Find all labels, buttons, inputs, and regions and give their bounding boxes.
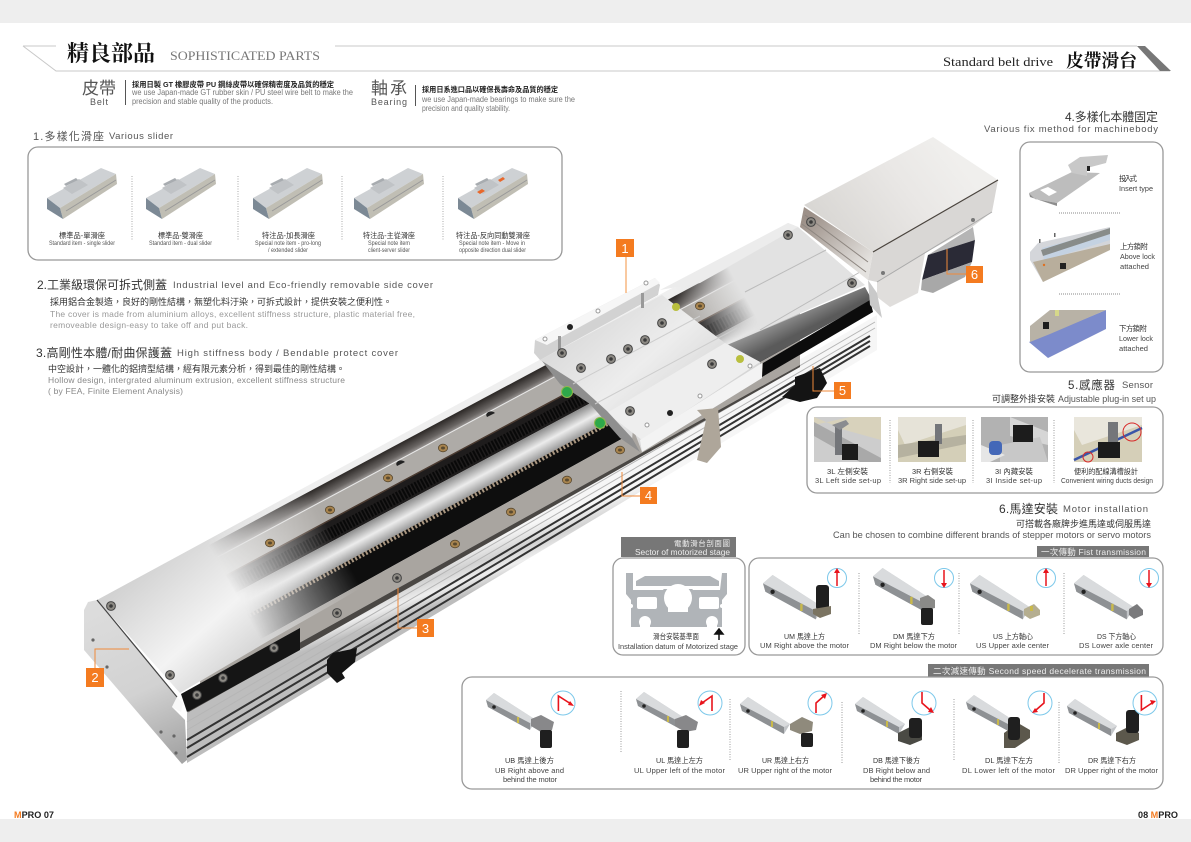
sensor 3R: 3R Right side set-up [898, 476, 966, 485]
title: standard belt drive [943, 46, 1171, 71]
heading 6: motor installation [833, 501, 1151, 541]
US [970, 568, 1056, 650]
sensor wiring: Convenient wiring ducts design [1061, 476, 1153, 485]
belt note [82, 79, 354, 107]
heading 1: various slider [33, 129, 173, 143]
UM: UM 馬達上方 [784, 631, 825, 641]
top band [0, 0, 1191, 23]
callout 3: 3 [422, 621, 429, 636]
lower lock: attached [1119, 344, 1148, 353]
DL: DL Lower left of the motor [962, 766, 1056, 775]
datum label: 滑台安裝基準面 [653, 631, 699, 641]
section 3: high stiffness body [36, 345, 398, 396]
sensor 3I: 3I Inside set-up [986, 476, 1042, 485]
UL [634, 691, 726, 775]
section 2: removable side cover: 2.工業級環保可拆式側蓋 [37, 277, 167, 292]
slider: standard dual: 標準品-雙滑座 [158, 230, 203, 240]
slider: client-server: 特注品-主從滑座 [363, 230, 415, 240]
panel: fix method [1020, 142, 1163, 372]
belt note: 採用日製 GT 橡膠皮帶 PU 鋼絲皮帶以確保精密度及品質的穩定 [132, 79, 334, 89]
lower lock [1029, 310, 1153, 358]
belt note: precision and stable quality of the products. [132, 97, 273, 106]
slider: prolong: / extended slider [268, 247, 309, 254]
sensor 3R: 3R 右側安裝 [912, 466, 953, 476]
title: standard belt drive: 皮帶滑台 [1066, 51, 1138, 71]
sensor 3L: 3L Left side set-up [815, 476, 881, 485]
bearing note: precision and quality stability. [422, 104, 510, 113]
slider: standard single: 標準品-單滑座 [59, 230, 105, 240]
slider: client-server [354, 168, 424, 254]
bottom band [0, 819, 1191, 842]
callout 1 [616, 239, 634, 293]
slider: opposite direction: opposite direction dual slider [459, 247, 527, 254]
DM: DM Right below the motor [870, 641, 958, 650]
panel: second transmission [462, 677, 1163, 789]
sensor wiring [1061, 417, 1153, 485]
tag: sector of motorized stage: Sector of motorized stage [635, 548, 731, 557]
DR: DR Upper right of the motor [1065, 766, 1158, 775]
heading 5: sensor: Adjustable plug-in set up [1058, 394, 1156, 405]
section 3: high stiffness body: Hollow design, intergrated aluminum extrusion, excellent stiffness structure [48, 375, 345, 385]
callout 4 [622, 472, 657, 504]
UB: UB 馬達上後方 [505, 755, 554, 765]
near dark end block [181, 628, 300, 712]
above lock: Above lock [1120, 252, 1155, 261]
section 2: removable side cover: The cover is made from aluminium alloys, excellent stiffness structure, plastic material free, [50, 309, 415, 319]
callout 6: 6 [971, 267, 978, 282]
side wall [187, 315, 877, 763]
belt note: Belt [90, 97, 108, 107]
datum arrow [715, 629, 723, 640]
slider: standard dual: Standard item - dual slider [149, 240, 213, 247]
footer right: page 08 and brand: 08 MPRO [1138, 810, 1178, 821]
UB [486, 691, 575, 784]
callout 3 [398, 588, 434, 637]
DS [1074, 568, 1158, 650]
slider: opposite direction: Special note item - Move in [459, 240, 525, 247]
panel: first transmission [749, 558, 1163, 655]
slider: standard single [47, 168, 117, 247]
DB [855, 691, 936, 784]
heading 4: fix method [984, 109, 1158, 135]
lower lock: 下方鎖附 [1119, 323, 1148, 333]
slider: client-server: client-server slider [368, 247, 411, 254]
sensor near [327, 648, 357, 683]
slider: prolong: 特注品-加長滑座 [262, 230, 315, 240]
UB: behind the motor [503, 775, 558, 784]
slider: prolong [253, 168, 323, 254]
above lock [1030, 227, 1155, 282]
above lock: attached [1120, 262, 1149, 271]
tag: sector of motorized stage: 電動滑台剖面圖 [674, 538, 730, 548]
title: sophisticated parts: 精良部品 [67, 41, 155, 66]
heading 5: sensor: 可調整外掛安裝 [992, 393, 1055, 404]
panel: sector [613, 558, 745, 655]
motor cover and motor [800, 137, 998, 318]
insert type: 投入式 [1119, 173, 1138, 183]
DR: DR 馬達下右方 [1088, 755, 1136, 765]
far cover [660, 223, 873, 377]
carriage [534, 278, 762, 463]
DL [962, 691, 1056, 775]
callout 2 [86, 649, 129, 687]
UR [738, 691, 832, 775]
section 3: high stiffness body: 中空設計，一體化的鋁擠型結構，經有限元素分析，得到最佳的剛性結構。 [48, 363, 345, 374]
panel: sensor [807, 407, 1163, 493]
belt note: we use Japan-made GT rubber skin / PU steel wire belt to make the [131, 88, 354, 97]
section 3: high stiffness body: ( by FEA, Finite Element Analysis) [48, 386, 183, 396]
UB: UB Right above and [495, 766, 564, 775]
US: US 上方軸心 [993, 631, 1033, 641]
near cover fade [98, 494, 356, 693]
tag: first transmission: 一次傳動 Fist transmission [1041, 547, 1146, 557]
heading 6: motor installation: Can be chosen to combine different brands of stepper motors or servo motors [833, 530, 1151, 541]
sensor far [782, 368, 827, 402]
callout 2: 2 [91, 670, 99, 685]
above lock: 上方鎖附 [1120, 241, 1148, 251]
UL: UL 馬達上左方 [656, 755, 703, 765]
callout 5 [813, 366, 851, 399]
heading 1: various slider: 1.多樣化滑座 [33, 129, 104, 143]
DB: behind the motor [870, 775, 922, 784]
insert type [1029, 155, 1153, 206]
heading 6: motor installation: Motor installation [1063, 504, 1148, 515]
sensor wiring: 便利的配線溝槽設計 [1074, 466, 1138, 476]
slider: opposite direction [456, 168, 530, 254]
DL: DL 馬達下左方 [985, 755, 1033, 765]
title: sophisticated parts [67, 41, 320, 66]
heading 5: sensor: 5.感應器 [1068, 378, 1116, 392]
callout 5: 5 [839, 383, 846, 398]
sensor 3I: 3I 內藏安裝 [995, 466, 1033, 476]
UR: UR Upper right of the motor [738, 766, 832, 775]
insert type: Insert type [1119, 184, 1153, 193]
UR: UR 馬達上右方 [762, 755, 809, 765]
DM [870, 568, 958, 650]
bearing note: 採用日系進口品以確保長壽命及品質的穩定 [422, 84, 558, 94]
bearing note: Bearing [371, 97, 407, 107]
sensor 3L: 3L 左側安裝 [827, 466, 869, 476]
lower lock: Lower lock [1119, 334, 1153, 343]
DS: DS Lower axle center [1079, 641, 1154, 650]
callout 4: 4 [645, 488, 652, 503]
slider: standard single: Standard item - single slider [49, 240, 116, 247]
US: US Upper axle center [976, 641, 1050, 650]
tag: second transmission: 二次減速傳動 Second speed decelerate transmission [933, 666, 1146, 676]
DB: DB Right below and [863, 766, 930, 775]
callout 1: 1 [621, 241, 629, 256]
extrusion cross-section [626, 573, 727, 628]
bearing note: 軸 承 [371, 79, 407, 98]
heading 5: sensor: Sensor [1122, 380, 1153, 391]
heading 4: fix method: 4.多樣化本體固定 [1065, 109, 1158, 124]
slider: opposite direction: 特注品-反向同動雙滑座 [456, 230, 530, 240]
slider: prolong: Special note item - pro-long [255, 240, 321, 247]
bearing note [371, 79, 576, 113]
footer left: brand and page 07: MPRO 07 [14, 810, 54, 821]
section 2: removable side cover: removeable design-easy to take off and put back. [50, 320, 248, 330]
title: standard belt drive: Standard belt drive [943, 54, 1053, 69]
top channel stripes [97, 224, 800, 713]
title: sophisticated parts: SOPHISTICATED PARTS [170, 48, 320, 63]
DM: DM 馬達下方 [893, 631, 935, 641]
section 3: high stiffness body: High stiffness body / Bendable protect cover [177, 348, 398, 359]
sensor 3R [898, 417, 966, 485]
bearing note: we use Japan-made bearings to make sure the [421, 95, 576, 104]
callout 6 [947, 249, 983, 283]
rail screws [107, 444, 625, 679]
heading 1: various slider: Various slider [109, 131, 173, 142]
UM: UM Right above the motor [760, 641, 850, 650]
section 2: removable side cover [37, 277, 433, 330]
UM [760, 568, 850, 650]
DB: DB 馬達下後方 [873, 755, 920, 765]
sensor 3I [981, 417, 1048, 485]
datum label: Installation datum of Motorized stage [618, 642, 738, 651]
slider: standard dual [146, 168, 216, 247]
heading 6: motor installation: 可搭載各廠牌步進馬達或伺服馬達 [1016, 518, 1151, 529]
heading 6: motor installation: 6.馬達安裝 [999, 501, 1058, 516]
header frame lines [23, 46, 1170, 71]
section 3: high stiffness body: 3.高剛性本體/耐曲保護蓋 [36, 345, 172, 360]
main product photo: belt drive stage [84, 137, 998, 764]
panel: various slider [28, 147, 562, 260]
DS: DS 下方軸心 [1097, 631, 1136, 641]
belt note: 皮 帶 [82, 79, 116, 98]
UL: UL Upper left of the motor [634, 766, 726, 775]
section 2: removable side cover: 採用鋁合金製造，良好的剛性結構，無塑化料汙染，可拆式設計，提供安裝之便利性。 [50, 296, 392, 307]
slider: client-server: Special note item [368, 240, 410, 247]
DR [1065, 691, 1158, 775]
end cap [84, 600, 187, 764]
datum label [618, 631, 738, 651]
sensor 3L [814, 417, 881, 485]
heading 4: fix method: Various fix method for machinebody [984, 124, 1158, 135]
tag: sector of motorized stage [621, 537, 736, 557]
section 2: removable side cover: Industrial level and Eco-friendly removable side cover [173, 280, 433, 291]
heading 5: sensor [992, 378, 1156, 405]
